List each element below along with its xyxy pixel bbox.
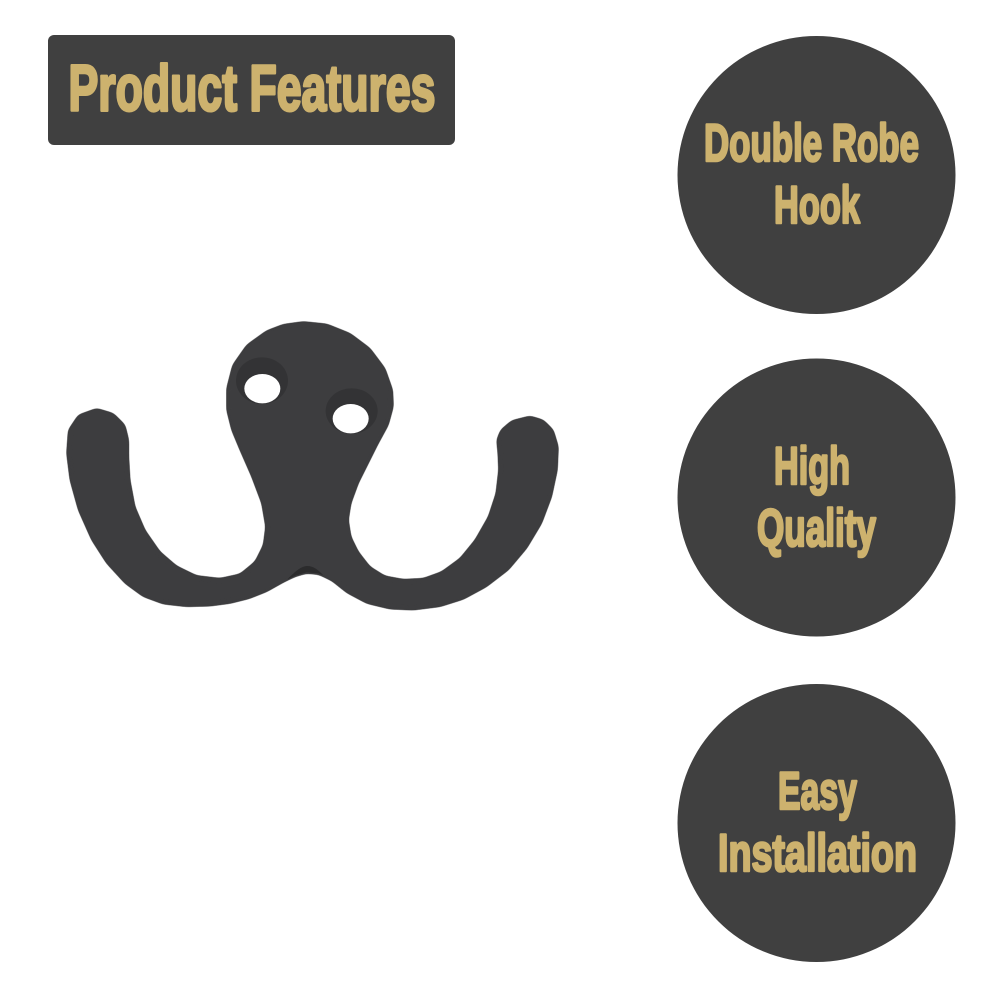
underside fold of the hook (287, 566, 323, 579)
feature circle: double robe hook (678, 36, 956, 314)
left screw hole (236, 357, 288, 404)
heading background (48, 35, 455, 145)
right screw hole (326, 388, 378, 434)
feature label line 2: Quality (757, 499, 876, 558)
feature label line 1: High (774, 437, 850, 496)
feature label line 2: Hook (774, 176, 860, 235)
hook body (67, 322, 558, 610)
product image: double robe hook (67, 322, 558, 610)
panel: product features heading (48, 35, 455, 145)
feature label line 2: Installation (718, 824, 917, 883)
feature label line 1: Easy (778, 762, 857, 821)
feature circle: easy installation (678, 684, 956, 962)
heading text: Product Features (68, 52, 436, 124)
feature circle: high quality (678, 358, 956, 636)
